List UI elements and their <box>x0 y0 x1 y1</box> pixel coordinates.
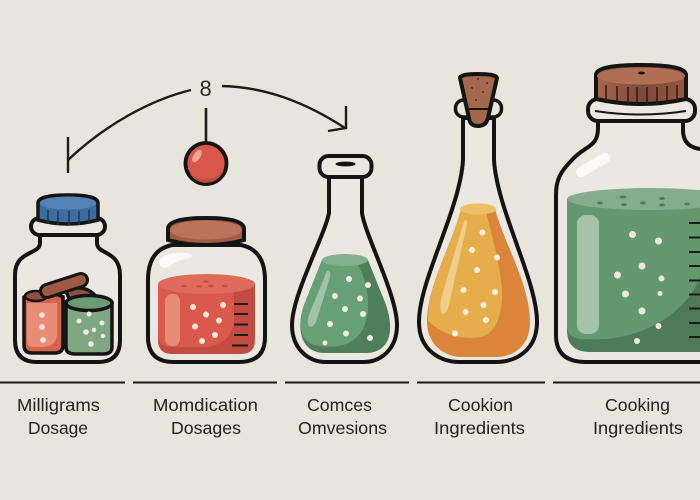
orange liquid <box>427 204 530 357</box>
flask lip <box>320 156 372 177</box>
blue cap <box>38 195 98 225</box>
label: comces omvesions <box>298 395 387 438</box>
label: comces omvesions: Comces <box>307 395 372 415</box>
flask 1: conversions <box>292 156 397 362</box>
jar 1: milligrams dosage <box>15 195 120 362</box>
curved arrows with number 8: 8 <box>200 76 212 101</box>
curved arrows with number 8 <box>68 76 346 173</box>
brown lid <box>168 218 244 245</box>
baseline rules <box>0 382 700 384</box>
green liquid <box>300 254 390 353</box>
green capsule <box>66 296 112 354</box>
neck ring <box>456 100 502 117</box>
flask 2: cookion ingredients <box>419 74 537 362</box>
jar 2: medication dosages <box>148 218 265 362</box>
glass highlight <box>159 253 192 268</box>
label: cooking ingredients <box>593 395 683 438</box>
cork <box>460 74 497 126</box>
red liquid <box>158 274 255 354</box>
label: cooking ingredients: Cooking <box>605 395 670 415</box>
hanging red ball <box>186 108 226 184</box>
green liquid <box>567 188 700 352</box>
brown screw cap <box>596 65 686 104</box>
label: cookion ingredients <box>434 395 525 438</box>
label: cookion ingredients: Ingredients <box>434 418 525 438</box>
label: cooking ingredients: Ingredients <box>593 418 683 438</box>
label: cookion ingredients: Cookion <box>448 395 513 415</box>
jar 3: cooking ingredients <box>556 65 700 362</box>
label: milligrams dosage <box>17 395 100 438</box>
red capsule <box>24 291 63 353</box>
label: comces omvesions: Omvesions <box>298 418 387 438</box>
glass highlight <box>581 158 605 172</box>
label: momdication dosages <box>153 395 258 438</box>
brown capsule <box>47 280 81 291</box>
brown pill behind <box>66 288 98 302</box>
label: momdication dosages: Momdication <box>153 395 258 415</box>
label: milligrams dosage: Milligrams <box>17 395 100 415</box>
label: milligrams dosage: Dosage <box>28 418 88 438</box>
label: momdication dosages: Dosages <box>171 418 241 438</box>
